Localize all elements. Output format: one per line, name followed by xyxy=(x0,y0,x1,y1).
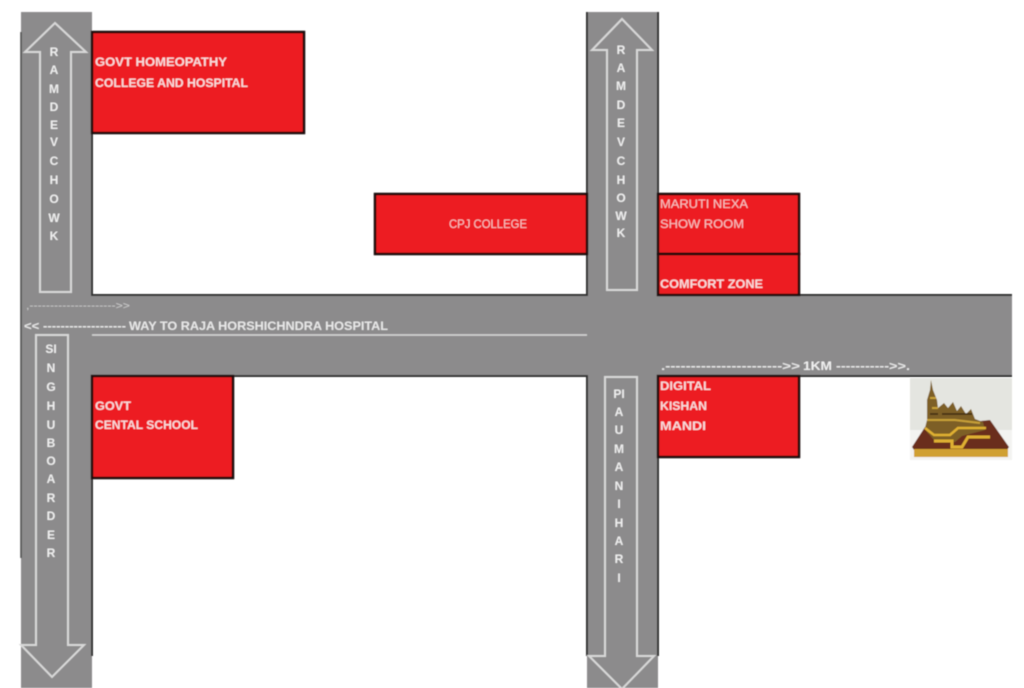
panel: Comfort Zone: COMFORT ZONE xyxy=(660,277,763,291)
arrow: Ramdev Chowk centre: O xyxy=(616,191,626,205)
panel: Govt Homeopathy College and Hospital: COLLEGE AND HOSPITAL xyxy=(95,76,248,90)
arrow: Piau Manihari: H xyxy=(615,516,623,530)
arrow: Piau Manihari: A xyxy=(615,460,624,474)
arrow: Ramdev Chowk left: W xyxy=(48,211,60,225)
arrow: Ramdev Chowk centre: E xyxy=(617,116,625,130)
arrow: Piau Manihari xyxy=(589,377,654,688)
arrow: Ramdev Chowk centre: D xyxy=(617,98,626,112)
arrow: Singhu Boarder: U xyxy=(47,418,55,432)
arrow: Piau Manihari: R xyxy=(615,552,624,566)
arrow: Singhu Boarder: E xyxy=(47,528,55,542)
panel: Govt Homeopathy College and Hospital xyxy=(92,32,304,133)
arrow: Singhu Boarder xyxy=(21,335,84,677)
distance label: 1 km: ----------->>. xyxy=(836,359,910,373)
distance label: 1 km xyxy=(661,359,910,373)
arrow: Ramdev Chowk centre: H xyxy=(617,173,625,187)
road label: way to Raja Horshichndra Hospital: << ------------------- xyxy=(24,319,126,333)
panel: Govt Central School: GOVT xyxy=(95,399,132,413)
arrow: Ramdev Chowk centre: W xyxy=(615,209,627,223)
arrow: Piau Manihari: PI xyxy=(613,387,625,401)
arrow: Singhu Boarder: R xyxy=(47,491,56,505)
arrow: Ramdev Chowk left: C xyxy=(50,154,59,168)
arrow: Ramdev Chowk left: R xyxy=(50,45,59,59)
panel: Digital Kishan Mandi: DIGITAL xyxy=(660,379,711,393)
arrow: Piau Manihari: A xyxy=(615,534,624,548)
arrow: Ramdev Chowk left: A xyxy=(50,63,59,77)
arrow: Piau Manihari: I xyxy=(617,497,621,511)
arrow: Ramdev Chowk left: E xyxy=(50,118,58,132)
arrow: Ramdev Chowk left: M xyxy=(49,82,59,96)
arrow: Ramdev Chowk centre: R xyxy=(617,43,626,57)
arrow: Singhu Boarder: H xyxy=(47,399,55,413)
arrow: Piau Manihari: N xyxy=(615,479,623,493)
panel: Maruti Nexa Show Room xyxy=(658,194,799,254)
panel: Digital Kishan Mandi: KISHAN xyxy=(660,399,707,413)
arrow: Piau Manihari: M xyxy=(614,442,624,456)
arrow: Ramdev Chowk left: D xyxy=(50,100,59,114)
panel: Maruti Nexa Show Room: SHOW ROOM xyxy=(660,217,744,231)
arrow: Ramdev Chowk centre: M xyxy=(616,79,626,93)
arrow: Singhu Boarder: O xyxy=(46,454,56,468)
panel: Digital Kishan Mandi xyxy=(658,376,799,457)
arrow: Ramdev Chowk centre xyxy=(592,19,652,290)
road label: way to Raja Horshichndra Hospital: ,--------------------->> xyxy=(26,301,130,312)
arrow: Ramdev Chowk left xyxy=(25,23,86,292)
arrow: Singhu Boarder: R xyxy=(47,546,56,560)
arrow: Ramdev Chowk centre: C xyxy=(617,154,626,168)
arrow: Singhu Boarder: N xyxy=(47,361,55,375)
icon: temple model xyxy=(910,378,1012,460)
road label: way to Raja Horshichndra Hospital xyxy=(24,301,587,335)
arrow: Singhu Boarder: B xyxy=(47,436,56,450)
arrow: Ramdev Chowk centre: A xyxy=(617,61,626,75)
arrow: Singhu Boarder: A xyxy=(47,472,56,486)
distance label: 1 km: 1KM xyxy=(803,359,832,373)
panel: Digital Kishan Mandi: MANDI xyxy=(660,419,706,433)
arrow: Singhu Boarder: D xyxy=(47,509,56,523)
panel: Govt Homeopathy College and Hospital: GOVT HOMEOPATHY xyxy=(95,55,227,69)
arrow: Ramdev Chowk centre: V xyxy=(617,135,625,149)
panel: CPJ College: CPJ COLLEGE xyxy=(449,217,527,231)
panel: Maruti Nexa Show Room: MARUTI NEXA xyxy=(660,197,748,211)
arrow: Piau Manihari: U xyxy=(615,423,623,437)
arrow: Ramdev Chowk centre: K xyxy=(617,226,626,240)
arrow: Ramdev Chowk left: O xyxy=(49,192,59,206)
arrow: Piau Manihari: I xyxy=(617,571,621,585)
panel: Govt Central School xyxy=(92,376,233,478)
arrow: Ramdev Chowk left: K xyxy=(50,229,59,243)
road label: way to Raja Horshichndra Hospital: WAY TO RAJA HORSHICHNDRA HOSPITAL xyxy=(129,319,388,333)
distance label: 1 km: .----------------------->> xyxy=(661,359,800,373)
arrow: Ramdev Chowk left: V xyxy=(50,135,58,149)
panel: Govt Central School: CENTAL SCHOOL xyxy=(95,418,198,432)
arrow: Ramdev Chowk left: H xyxy=(50,173,58,187)
arrow: Singhu Boarder: G xyxy=(46,380,56,394)
arrow: Piau Manihari: A xyxy=(615,405,624,419)
arrow: Singhu Boarder: SI xyxy=(45,342,57,356)
panel: CPJ College xyxy=(375,194,587,254)
panel: Comfort Zone xyxy=(658,254,799,295)
